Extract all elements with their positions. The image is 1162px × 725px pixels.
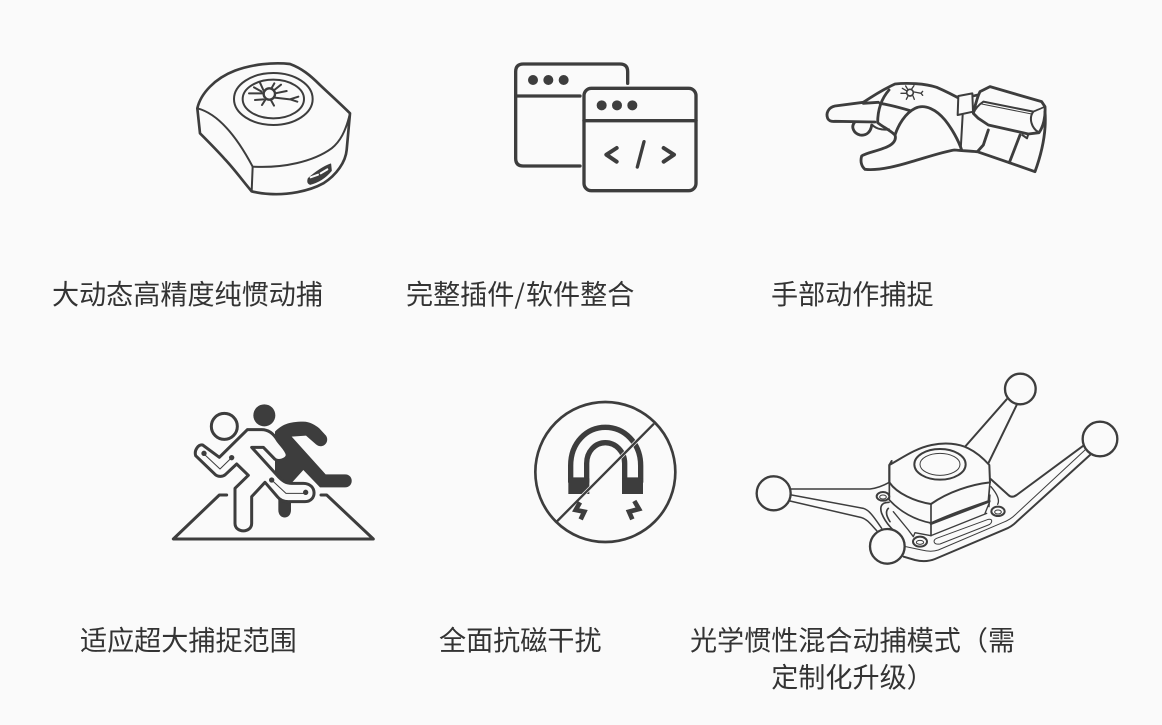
icon: runner xyxy=(173,404,373,539)
icon: software windows xyxy=(516,64,696,191)
text: anti magnetic interference: 全面抗磁干扰 xyxy=(439,625,602,656)
icon: hand capture xyxy=(827,83,1045,172)
text: large capture range: 适应超大捕捉范围 xyxy=(80,625,297,656)
text: hand motion capture: 手部动作捕捉 xyxy=(771,279,934,310)
icon: sensor device xyxy=(197,63,350,194)
text: high dynamic inertial mocap: 大动态高精度纯惯动捕 xyxy=(52,279,323,310)
text: optical inertial hybrid mode: 光学惯性混合动捕模式（需定制化升级） xyxy=(690,625,1015,693)
icon: optical marker rig xyxy=(757,374,1117,564)
text: plugin and software integration: 完整插件/软件整合 xyxy=(406,273,634,312)
icon: anti magnetic xyxy=(535,402,675,542)
